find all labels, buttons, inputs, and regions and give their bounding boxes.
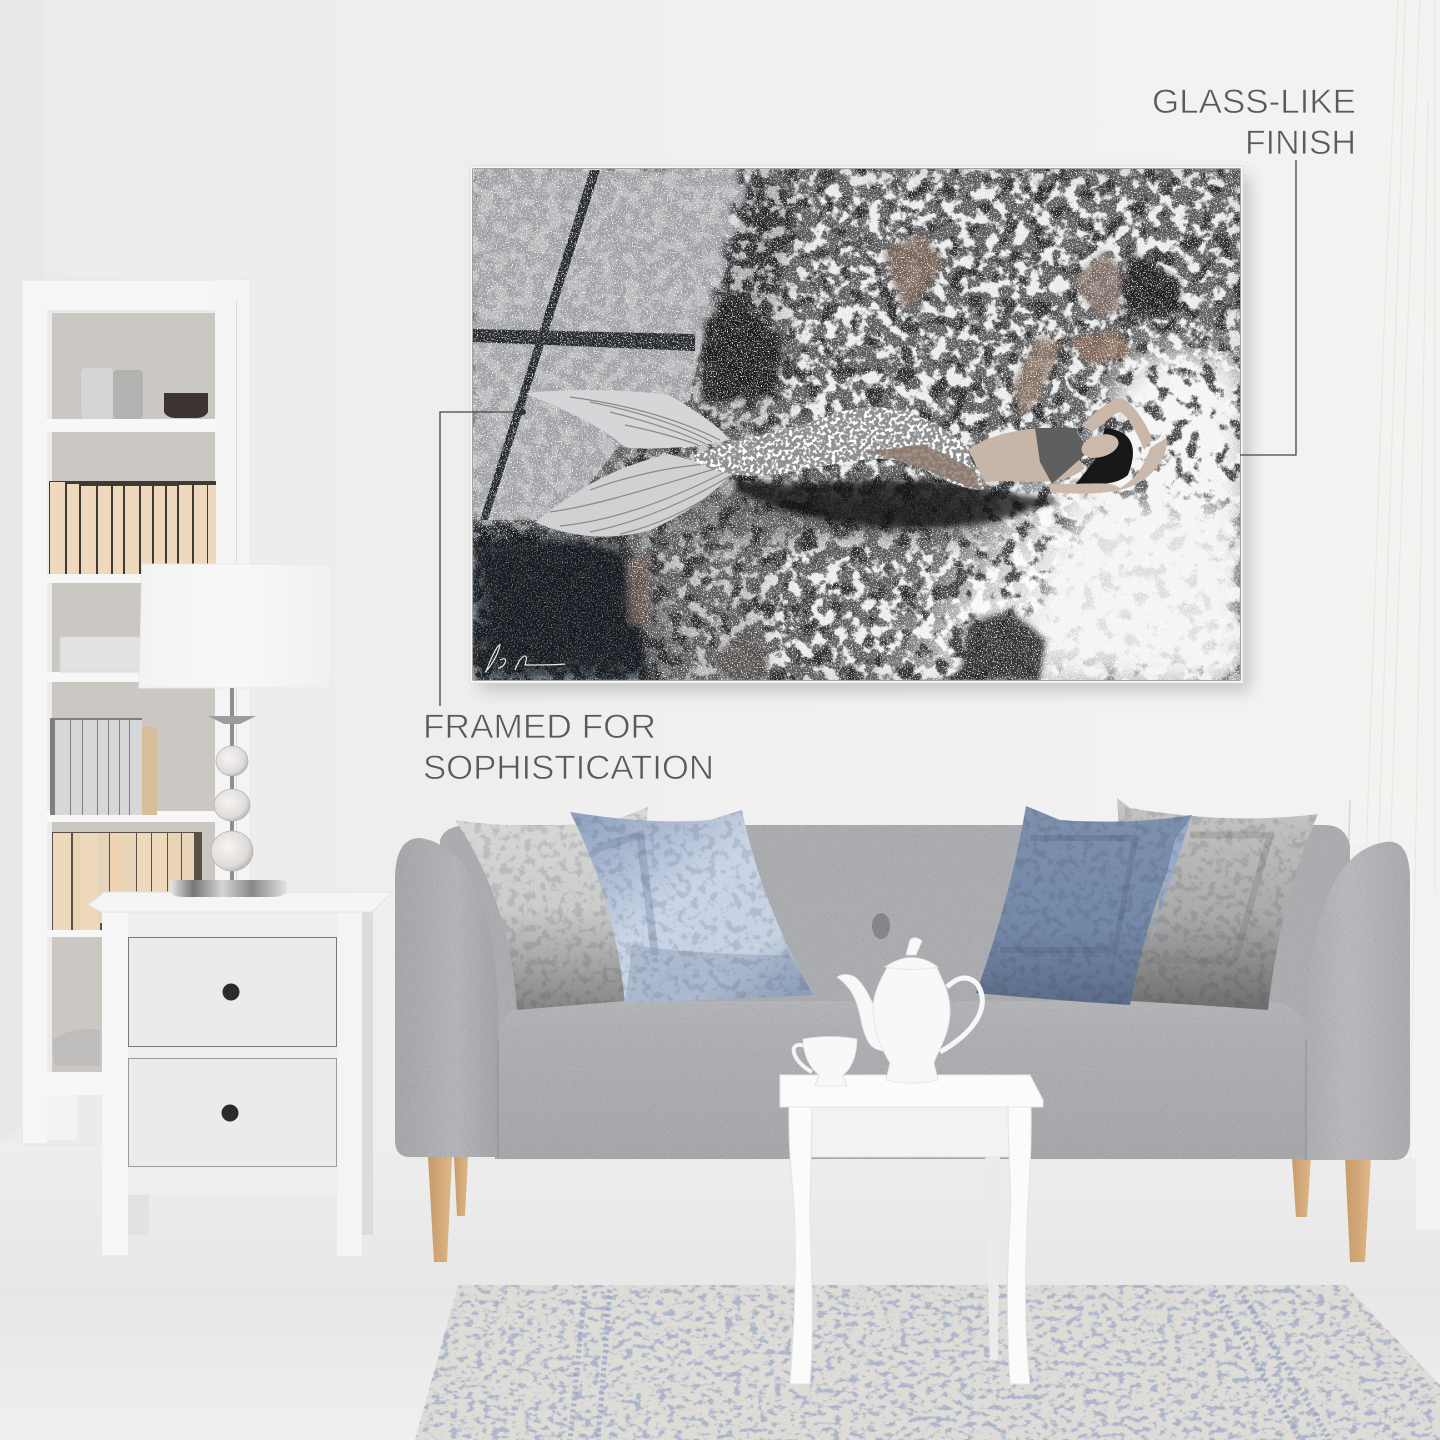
tail fin lower [535,454,735,537]
table top [780,1075,1043,1107]
lamp shade [139,564,332,688]
grey cushion right [1117,798,1318,1010]
callout: glass-like finish [1152,83,1356,455]
grey books [50,718,157,815]
dark blotches [473,169,1240,680]
callout: glass-like finish: FINISH [1245,124,1356,162]
painting shadow [480,176,1250,691]
table apron [808,1105,1010,1157]
grey glass zone [473,169,752,520]
white water lower right [1014,340,1240,680]
white storage box [60,637,140,672]
quilting texture [450,795,1320,1015]
callout: framed for sophistication [423,409,714,787]
sofa [395,825,1410,1160]
callout: framed for sophistication: SOPHISTICATION [423,749,714,787]
rug [410,1280,1440,1440]
callout: glass-like finish: GLASS-LIKE [1152,83,1356,121]
white frame [470,166,1243,683]
fin ribs [550,397,732,534]
front left leg [789,1106,812,1384]
cream books top row [49,481,216,574]
hair [1075,428,1133,485]
callout: framed for sophistication: FRAMED FOR [423,708,656,746]
cream books lower row [52,832,202,930]
white blotches [473,169,1240,680]
table lamp [139,564,332,897]
side table at right edge [1416,892,1440,1230]
fine sparkles [473,169,1240,680]
grey cushion left [455,807,648,1010]
sofa button [872,913,890,939]
bookcase shelves [47,419,217,1095]
arms [1082,398,1152,450]
bookcase interior [47,310,215,1110]
signature [485,645,565,672]
front right leg [1007,1106,1031,1384]
ceramic jars [81,368,143,419]
rocks [625,233,1180,680]
floor [0,1142,1440,1440]
drawer knobs [222,984,240,1122]
dark sparkle zone [473,525,650,680]
scaled tail and hips [690,407,985,490]
cushions [450,795,1320,1015]
dark bowl [164,393,208,418]
face [1081,434,1119,458]
upper drawer [128,938,336,1046]
teacup [794,1036,857,1086]
lamp stem [230,688,234,880]
painting base tones [473,169,1240,680]
torso [968,428,1085,482]
left wall corner [0,0,45,1140]
bookcase [22,280,250,1144]
light blue cushion [570,810,813,1003]
tail fin upper [525,390,730,449]
right arm [1306,842,1410,1160]
side table [780,1075,1043,1384]
left arm [395,838,498,1157]
sofa back [440,825,1350,1070]
back wall [0,0,1440,1145]
curtain [1340,0,1440,1158]
sofa legs [428,1157,1371,1262]
back leg [985,1155,1000,1360]
sofa seat [495,1001,1310,1159]
glass balls [211,746,253,871]
window shadows [480,170,600,520]
teapot [837,938,982,1083]
silver dish [52,1029,100,1066]
chrome base [170,880,287,897]
framed mermaid painting [470,166,1243,683]
lower drawer [128,1058,336,1166]
dark blue cushion [976,806,1192,1005]
mermaid shadow [735,478,1060,529]
nightstand [88,892,392,1256]
mermaid [525,390,1167,537]
